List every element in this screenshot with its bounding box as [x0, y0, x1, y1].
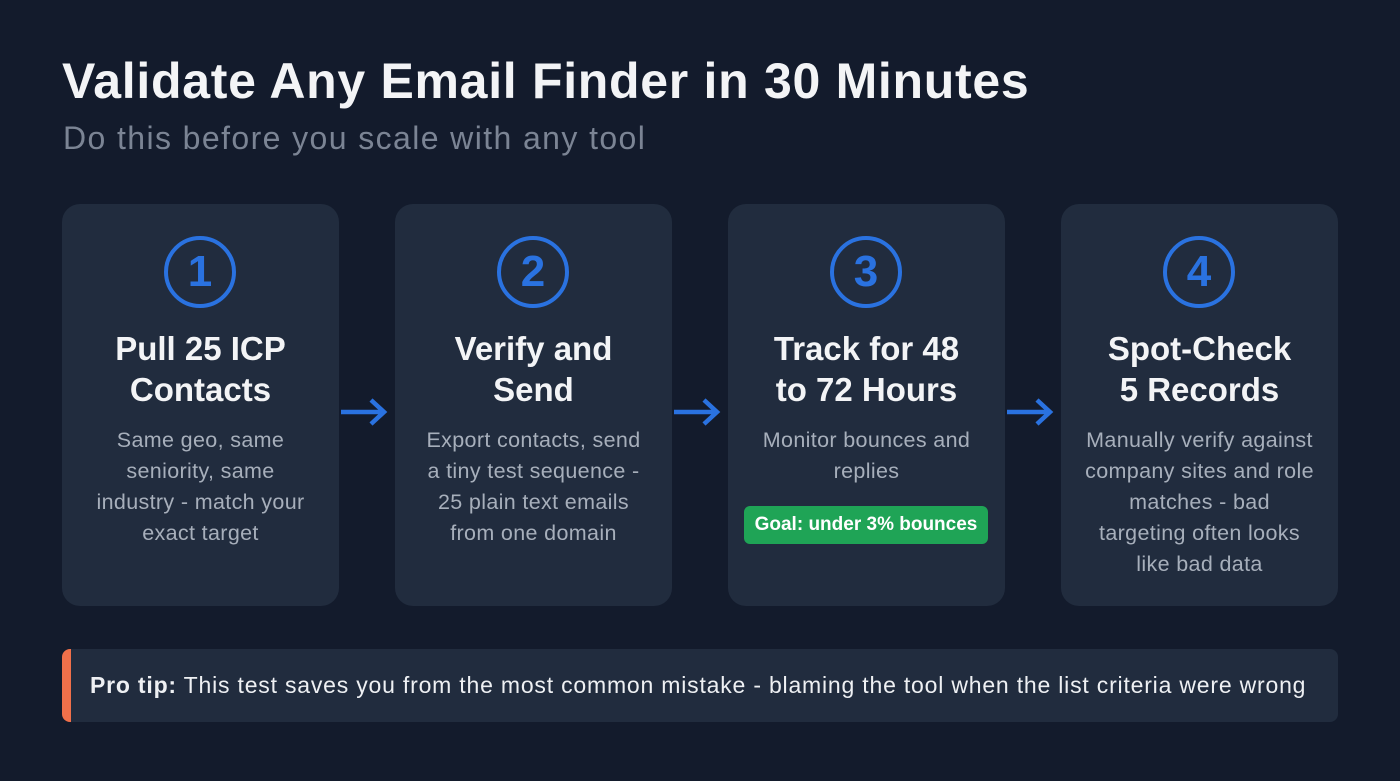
text: step 4: [1085, 428, 1314, 576]
badge: goal: Goal: under 3% bounces: [755, 514, 977, 535]
text: step 2: a tiny test sequence -: [427, 459, 640, 483]
text: step 4: Manually verify against: [1086, 428, 1313, 452]
text: step 4: company sites and role: [1085, 459, 1314, 483]
heading: step 4: 5 Records: [1120, 371, 1279, 408]
heading: step 4: Spot-Check: [1108, 330, 1291, 367]
title: Validate Any Email Finder in 30 Minutes: [62, 53, 1029, 109]
arrow 3: [1007, 398, 1054, 426]
heading: step 2: Verify and: [455, 330, 612, 367]
heading: step 3: to 72 Hours: [776, 371, 957, 408]
arrow 2: [674, 398, 720, 426]
arrow 1: [341, 398, 388, 426]
text: step 1: industry - match your: [96, 490, 305, 514]
heading: step 2: [454, 330, 612, 408]
icon: number 3: [830, 236, 902, 308]
text: step 3: [763, 428, 970, 483]
text: step 3: Monitor bounces and: [763, 428, 970, 452]
heading: step 4: [1108, 330, 1292, 408]
heading: step 1: [115, 330, 286, 408]
panel: step 2: [395, 204, 672, 606]
icon: number 2: 2: [521, 247, 545, 296]
panel: step 1: [62, 204, 339, 606]
heading: step 1: Pull 25 ICP: [115, 330, 286, 367]
text: step 4: targeting often looks: [1099, 521, 1300, 545]
icon: number 1: 1: [188, 247, 212, 296]
icon: number 4: [1163, 236, 1235, 308]
icon: number 4: 4: [1187, 247, 1211, 296]
text: step 2: Export contacts, send: [426, 428, 641, 452]
heading: step 2: Send: [493, 371, 574, 408]
text: step 1: [96, 428, 305, 545]
callout: pro tip: [62, 649, 1338, 722]
callout: pro tip: Pro tip: This test saves you from the most common mistake - blaming the tool when the list criteria were wrong: [90, 672, 1306, 698]
heading: step 1: Contacts: [130, 371, 271, 408]
icon: number 1: [164, 236, 236, 308]
subtitle: Do this before you scale with any tool: [63, 120, 646, 156]
heading: step 3: [774, 330, 959, 408]
heading: step 3: Track for 48: [774, 330, 959, 367]
text: step 2: [426, 428, 641, 545]
text: step 3: replies: [834, 459, 899, 483]
badge: goal: [744, 506, 988, 544]
text: step 4: like bad data: [1136, 552, 1263, 576]
text: step 2: 25 plain text emails: [438, 490, 629, 514]
text: step 4: matches - bad: [1129, 490, 1270, 514]
text: step 1: seniority, same: [126, 459, 275, 483]
panel: step 3: [728, 204, 1005, 606]
text: step 1: Same geo, same: [117, 428, 284, 452]
text: step 1: exact target: [142, 521, 259, 545]
icon: number 3: 3: [854, 247, 878, 296]
panel: step 4: [1061, 204, 1338, 606]
icon: number 2: [497, 236, 569, 308]
text: step 2: from one domain: [450, 521, 617, 545]
